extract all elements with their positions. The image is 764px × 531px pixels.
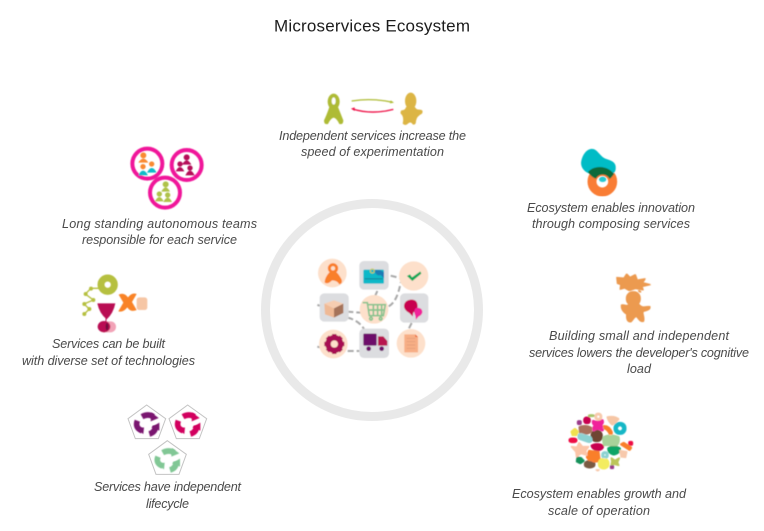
caption: Services have independent [94,480,242,494]
caption: Ecosystem enables innovation [527,201,695,215]
icon: recycling pentagons [128,405,207,474]
icon: cluster of shapes [569,414,633,471]
caption [529,329,749,376]
connectors [317,276,412,351]
panel: innovation [527,149,695,231]
icon: cart [363,303,385,320]
icon: two services exchanging [324,93,423,125]
panel: autonomous teams [62,149,258,247]
icon: chat bubbles [404,300,422,320]
caption: speed of experimentation [301,145,444,159]
icon: delivery truck [363,334,387,351]
panel: independent lifecycle [94,405,242,511]
panel: diverse technologies [22,278,196,368]
caption: services lowers the developer's cognitive [529,346,749,360]
ring [266,204,478,416]
caption: scale of operation [548,504,650,518]
caption [279,129,466,159]
title: Microservices Ecosystem [274,16,470,36]
icon: check mark [407,271,421,281]
caption: Long standing autonomous teams [62,217,258,231]
icon: user [325,265,342,284]
tiles [318,259,347,287]
icon: three team circles [132,149,202,208]
caption: through composing services [532,217,691,231]
caption [62,217,258,247]
icon: box [324,300,343,318]
caption: with diverse set of technologies [22,354,196,368]
panel: experimentation [279,93,466,159]
caption: Ecosystem enables growth and [512,487,687,501]
icon: gear [324,334,344,354]
icon: technology shapes [82,278,147,332]
icon: developer with burst [617,274,651,322]
icon: composed services [581,149,616,192]
service map icons [317,259,428,358]
icon: payment card [363,269,384,284]
panel: central service ecosystem [266,204,478,416]
caption: lifecycle [146,497,189,511]
caption [527,201,695,231]
caption: Independent services increase the [279,129,466,143]
caption [22,337,196,368]
caption [512,487,687,518]
caption [94,480,242,511]
caption: Building small and independent [549,329,730,343]
caption: load [627,362,652,376]
icon: document [404,334,418,352]
caption: Services can be built [52,337,166,351]
panel: cognitive load [529,274,749,376]
panel: growth and scale [512,414,687,518]
caption: responsible for each service [82,233,237,247]
